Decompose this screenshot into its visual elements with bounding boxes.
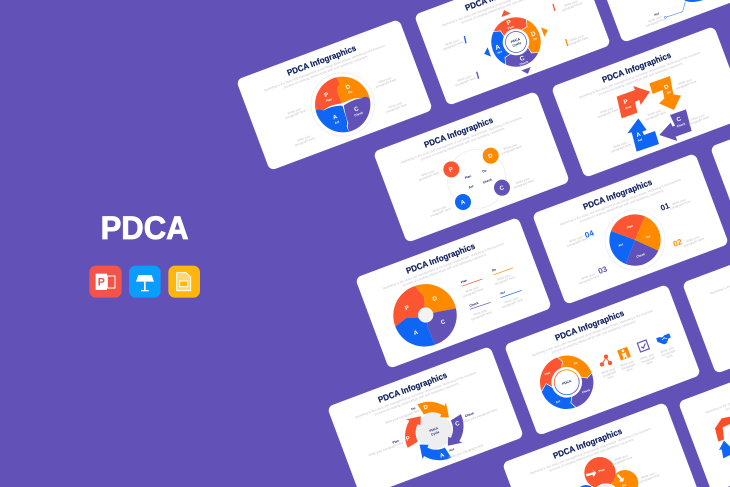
text block: right notes with markers: paragraph here — [567, 36, 589, 47]
panel: pie chart slide: process of creating relationships with and satisfying customers. — [579, 188, 665, 223]
text block: numbered notes: Write your — [672, 197, 686, 206]
chart: wavy quadrant circle: P — [324, 92, 330, 99]
chart: PDCA chevron ring: Check — [519, 60, 529, 67]
icon: Google Slides — [168, 266, 200, 298]
chart: angular donut: D — [432, 296, 439, 303]
chart: PDCA chevron ring: Do — [533, 36, 538, 41]
icon row: app logos — [89, 266, 200, 298]
chart: pie: Plan — [626, 224, 634, 230]
chart: wavy quadrant circle: Plan — [325, 97, 333, 103]
text block: icon captions: Write your — [601, 367, 616, 375]
chart: four block arrows: C — [676, 116, 683, 124]
chart: curved arrow cycle — [388, 385, 481, 477]
chart: wavy quadrant circle — [311, 73, 374, 136]
text block: arrow notes: paragraph here — [610, 142, 632, 154]
text block: circle notes: paragraph here — [418, 171, 440, 182]
text block: circle notes: Write your — [432, 205, 447, 214]
text block: arc labels and notes: A — [439, 452, 446, 460]
icon: person on orange tile — [617, 347, 631, 361]
chart: PDCA chevron ring: Cycle — [512, 41, 522, 48]
title: PDCA — [101, 210, 189, 246]
text block: arc labels and notes: Act — [449, 447, 456, 453]
text block: side notes: paragraph here — [375, 78, 397, 89]
text block: icon captions: paragraph — [602, 370, 617, 378]
text block: icon captions: here — [646, 360, 653, 366]
chart: connector and Act label: Act — [654, 11, 661, 17]
panel: wavy pie slide: PDCA Infographics — [286, 43, 358, 78]
panel: circles slide: PDCA Infographics — [423, 115, 495, 150]
text block: numbered notes: 02 — [672, 237, 684, 249]
chart: overlapping circles with arrows: Write your — [614, 453, 628, 462]
text block: side notes: Write your — [296, 134, 311, 143]
text block: arc labels and notes: D — [423, 404, 430, 411]
legend: Plan Do Check Act: Write your — [496, 273, 511, 282]
text block: circle notes: paragraph here — [501, 144, 523, 156]
panel: circles slide: process of creating relationships with and satisfying customers. — [420, 126, 506, 161]
chart: four circles on a ring: A — [460, 199, 467, 207]
text block: arrow notes: paragraph here — [597, 108, 619, 119]
panel: wavy pie slide — [236, 19, 433, 171]
text block: arc labels and notes: Do — [411, 406, 416, 411]
text block: numbered notes: paragraph here — [578, 274, 600, 285]
text block: arrow notes: paragraph here — [645, 110, 667, 122]
text block: circle notes: Write your — [515, 176, 530, 185]
chart: four circles on a ring: P — [448, 167, 454, 174]
text block: arc labels and notes: Plan — [392, 439, 400, 445]
text block: numbered notes: 04 — [584, 228, 596, 240]
panel: arc arrows slide: Marketing is the study and management of exchange relationships. Marketing is the business — [354, 370, 477, 420]
panel: overlapping circles slide: Marketing is the study and management of exchange relationships. Marketing is the business — [529, 426, 652, 476]
chart: angular donut: P — [404, 305, 410, 312]
chart: four circles on a ring: Act — [468, 184, 475, 190]
panel: arrows slide — [551, 26, 730, 178]
chart: wavy quadrant circle: C — [354, 106, 360, 113]
chart: PDCA chevron ring — [472, 0, 560, 86]
legend: Plan Do Check Act: Plan — [460, 278, 468, 284]
chart: four circles on a ring — [443, 148, 510, 210]
chart: angular donut: C — [440, 319, 447, 326]
text block: arc labels and notes: Write your paragraph here — [448, 443, 484, 460]
chart: overlapping circles with arrows: paragraph here — [611, 455, 633, 467]
text block: numbered notes: Write your — [685, 235, 700, 244]
text block: icon captions — [601, 345, 677, 382]
chart: connector and Act label: paragraph here — [645, 17, 667, 28]
panel: pie chart slide — [532, 153, 729, 305]
text block: arc labels and notes: Write your paragraph here — [384, 408, 420, 425]
text block: arrow notes: Write your — [678, 77, 692, 86]
chart: PDCA chevron ring: D — [530, 30, 537, 39]
text block: arrow notes: Write your — [613, 140, 627, 149]
chart: four block arrows — [617, 76, 692, 152]
text block: arrow notes: paragraph here — [675, 79, 697, 91]
chart: wavy quadrant circle: Act — [334, 120, 340, 125]
chart: angular donut — [393, 284, 457, 347]
chart: PDCA chevron ring: Plan — [507, 24, 514, 30]
panel: cycle with icons slide: Marketing is the study and management of exchange relationships. Marketing is the business — [531, 308, 654, 358]
chart: PDCA cycle ring: Do — [573, 360, 578, 366]
text block: side notes: Write your — [377, 76, 392, 85]
text block: side notes — [284, 74, 408, 147]
panel: right edge slide two — [682, 222, 730, 374]
legend: Plan Do Check Act: paragraph here — [502, 298, 524, 309]
icon: network — [600, 355, 612, 366]
chart: four circles on a ring: C — [499, 185, 506, 192]
chart: four block arrows: Check — [676, 121, 686, 129]
text block: side notes: Write your — [287, 107, 302, 116]
chart: PDCA chevron ring: Act — [497, 49, 503, 55]
text block: arc labels and notes: C — [455, 421, 461, 428]
text block: numbered notes: 01 — [659, 201, 671, 213]
chart: four circles on a ring: D — [488, 153, 494, 160]
chart: four block arrows: D — [664, 84, 670, 91]
text block: left notes with markers: Write your — [445, 38, 459, 47]
text block: arc labels and notes — [368, 404, 498, 460]
chart: PDCA chevron ring: PDCA — [510, 37, 521, 44]
text block: circle notes — [417, 141, 535, 218]
text block: side notes: paragraph here — [285, 109, 307, 120]
text block: side notes: paragraph here — [294, 136, 316, 147]
text block: left notes with markers — [441, 36, 479, 87]
chart: curved arrow cycle: PDCA — [429, 426, 439, 433]
chart: angular donut: A — [413, 330, 420, 337]
panel: right edge slide three — [678, 341, 730, 487]
text block: icon captions: Write your — [620, 359, 635, 368]
panel: overlapping circles slide: PDCA Infographics — [552, 426, 624, 461]
panel: top right slide — [589, 0, 730, 43]
panel: wavy pie slide: Marketing is the study and management of exchange relationships. Marketing is the business — [263, 43, 386, 93]
panel: cycle with icons slide — [504, 284, 701, 436]
chart: overlapping circles with arrows — [576, 452, 660, 487]
chart: PDCA cycle ring: Act — [555, 399, 561, 404]
chart: connector and Act label: Write your — [648, 15, 662, 24]
chart: four circles on a ring: Plan — [464, 174, 472, 180]
panel: donut slide: PDCA Infographics — [405, 241, 477, 276]
icon: block arrow fragment — [715, 417, 730, 458]
text block: arc labels and notes: P — [405, 436, 411, 443]
text block: arrow notes: Write your — [690, 113, 705, 122]
chart: pie: Check — [636, 252, 646, 259]
panel: circles slide — [373, 91, 570, 243]
legend: Plan Do Check Act: paragraph here — [462, 287, 484, 298]
text block: numbered notes: Write your — [569, 235, 584, 244]
chart: PDCA chevron ring: C — [519, 55, 526, 63]
panel: chevron cycle slide — [414, 0, 611, 106]
panel: donut slide: process of creating relationships with and satisfying customers. — [402, 252, 488, 287]
text block: icon captions: here — [666, 353, 673, 359]
chart: PDCA cycle ring: PDCA — [562, 379, 572, 386]
chart: pie: Act — [618, 242, 624, 248]
panel: donut slide — [355, 217, 552, 369]
text block: circle notes: paragraph here — [513, 178, 535, 190]
text block: icon captions: Write your — [640, 352, 655, 361]
chart: wavy quadrant circle: A — [332, 114, 339, 121]
icon: checkbox — [637, 340, 649, 352]
chart: overlapping circles with arrows: Write your — [641, 471, 655, 480]
legend: Plan Do Check Act: paragraph here — [494, 275, 516, 286]
text block: numbered notes: paragraph here — [566, 237, 588, 248]
legend: Plan Do Check Act: Write your — [473, 308, 488, 317]
panel: arrows slide: process of creating relationships with and satisfying customers. — [598, 61, 684, 96]
panel: arc arrows slide: PDCA Infographics — [377, 370, 449, 405]
chart: PDCA cycle ring: Plan — [544, 370, 551, 376]
chart: PDCA chevron ring: A — [494, 44, 502, 52]
text block: right notes with markers: Write your — [569, 34, 584, 43]
text block: arrow notes: Write your — [599, 106, 614, 115]
text block: left notes with markers: paragraph here — [455, 76, 477, 87]
panel: arrows slide: PDCA Infographics — [601, 50, 673, 85]
text block: arrow notes: paragraph here — [688, 115, 710, 126]
icon: Keynote — [129, 266, 161, 298]
text block: arc labels and notes: Check — [464, 411, 475, 418]
panel: overlapping circles slide — [502, 402, 699, 487]
panel: cycle with icons slide: process of creating relationships with and satisfying customers. — [551, 319, 637, 354]
text block: icon captions: paragraph — [661, 349, 676, 357]
chart: connector and Act label — [644, 0, 703, 28]
chart: four circles on a ring: Check — [482, 177, 493, 185]
chart: PDCA cycle ring — [525, 340, 609, 424]
chart: four block arrows: Act — [637, 137, 643, 143]
panel: circles slide: Marketing is the study and management of exchange relationships. Marketing is the business — [400, 115, 523, 165]
text block: circle notes: Write your — [420, 169, 435, 178]
legend: Plan Do Check Act: Write your — [465, 285, 479, 294]
panel: donut slide: Marketing is the study and management of exchange relationships. Marketing is the business — [382, 241, 505, 291]
chart: PDCA cycle ring: Check — [581, 388, 591, 394]
text block: numbered notes: 03 — [597, 264, 609, 276]
text block: right notes with markers: paragraph here — [561, 1, 583, 12]
chart: four block arrows: P — [623, 99, 629, 106]
panel: right edge slide — [710, 86, 730, 238]
text block: left notes with markers: paragraph here — [442, 40, 464, 51]
chart: wavy quadrant circle: Do — [348, 89, 353, 95]
text block: right notes with markers — [553, 0, 589, 47]
chart: four block arrows: Plan — [625, 104, 632, 110]
chart: four block arrows: Do — [666, 90, 672, 95]
text block: side notes: paragraph here — [386, 103, 408, 114]
text block: circle notes: Write your — [503, 142, 518, 151]
text block: arc labels and notes: Write your paragraph here — [462, 407, 498, 424]
text block: arrow notes: Write your — [647, 108, 662, 117]
legend: Plan Do Check Act: paragraph here — [471, 310, 493, 321]
legend: Plan Do Check Act — [460, 267, 524, 321]
panel: wavy pie slide: process of creating relationships with and satisfying customers. — [283, 54, 369, 89]
text block: numbered notes: paragraph here — [683, 237, 705, 248]
text block: icon captions: here — [607, 374, 614, 380]
panel: pie chart slide: PDCA Infographics — [582, 177, 654, 212]
text block: arrow notes — [596, 76, 710, 154]
legend: Plan Do Check Act: Check — [469, 301, 479, 308]
text block: arc labels and notes: Write your paragraph here — [368, 441, 404, 457]
legend: Plan Do Check Act: Do — [491, 267, 497, 273]
text block: circle notes: paragraph here — [430, 207, 452, 218]
chart: wavy quadrant circle: Check — [354, 110, 364, 118]
text block: icon captions: here — [626, 367, 633, 373]
panel: arc arrows slide — [327, 346, 524, 487]
text block: left notes with markers: Write your — [457, 74, 472, 83]
panel: overlapping circles slide: process of creating relationships with and satisfying customers. — [549, 437, 635, 472]
panel: pie chart slide: Marketing is the study and management of exchange relationships. Marketing is the business — [559, 177, 682, 227]
legend: Plan Do Check Act: Write your — [504, 296, 519, 305]
text block: icon captions: paragraph — [641, 355, 656, 364]
chart: pie: Do — [646, 234, 651, 239]
chart: overlapping circles with arrows: Plan — [598, 467, 605, 473]
text block: numbered notes: Write your — [581, 272, 596, 281]
chart: four circles on a ring: Do — [482, 168, 487, 174]
icon row: network, person, checkbox, handshake — [600, 333, 672, 366]
text block: icon captions: Write your — [660, 346, 675, 354]
chart: curved arrow cycle: Cycle — [430, 430, 440, 437]
chart: four block arrows: A — [636, 132, 642, 139]
panel: cycle with icons slide: PDCA Infographics — [554, 308, 626, 343]
text block: icon captions: paragraph — [621, 362, 636, 371]
legend: Plan Do Check Act: Act — [500, 290, 507, 296]
text block: numbered notes: paragraph here — [669, 199, 691, 211]
panel: arc arrows slide: process of creating relationships with and satisfying customers. — [374, 381, 460, 416]
chart: PDCA chevron ring: P — [506, 19, 513, 27]
text block: side notes: Write your — [388, 101, 403, 110]
chart: overlapping circles with arrows: paragraph here — [638, 473, 660, 484]
panel: arrows slide: Marketing is the study and management of exchange relationships. Marketing is the business — [578, 50, 701, 100]
text block: numbered notes — [565, 196, 705, 285]
chart: wavy quadrant circle: D — [345, 84, 352, 91]
icon: PowerPoint: P — [98, 277, 105, 289]
chart: pie — [605, 210, 665, 270]
icon: handshake — [656, 333, 672, 346]
